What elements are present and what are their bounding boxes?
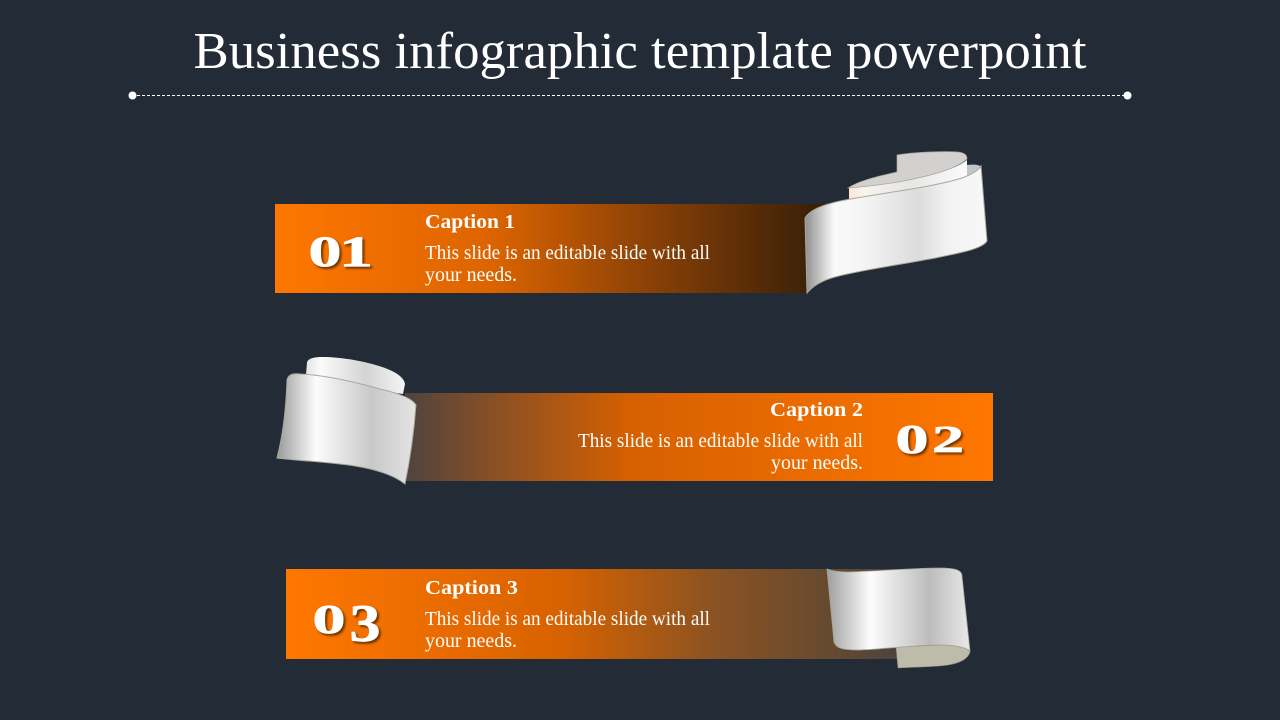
number 01: 0 [308,229,342,276]
number 03: 0 [312,596,346,642]
panel: banner 1 [275,152,987,293]
title: Business infographic template powerpoint [194,23,1087,80]
caption 1 body: your needs. [425,265,517,286]
caption 2 body: your needs. [771,453,863,474]
icon: curled ribbon 2 [277,357,416,484]
banner 2 bar [405,393,993,481]
caption 2 body: This slide is an editable slide with all [578,431,864,452]
caption 1 heading: Caption 1 [425,211,515,233]
title divider [128,92,1132,100]
caption 3 body: This slide is an editable slide with all [425,609,711,630]
panel: banner 2 [277,357,993,484]
icon: curled ribbon 1 [805,152,987,293]
number 02: 0 [896,416,928,462]
caption 3 heading: Caption 3 [425,577,518,599]
number 03: 3 [350,595,380,653]
panel: banner 3 [286,568,970,668]
caption 2 heading: Caption 2 [770,399,863,421]
icon: curled ribbon 3 [827,568,970,668]
number 02: 2 [932,419,964,461]
banner 1 bar [275,204,832,293]
number 01: 1 [339,229,373,276]
banner 3 bar [286,569,898,659]
caption 1 body: This slide is an editable slide with all [425,243,711,264]
caption 3 body: your needs. [425,631,517,652]
